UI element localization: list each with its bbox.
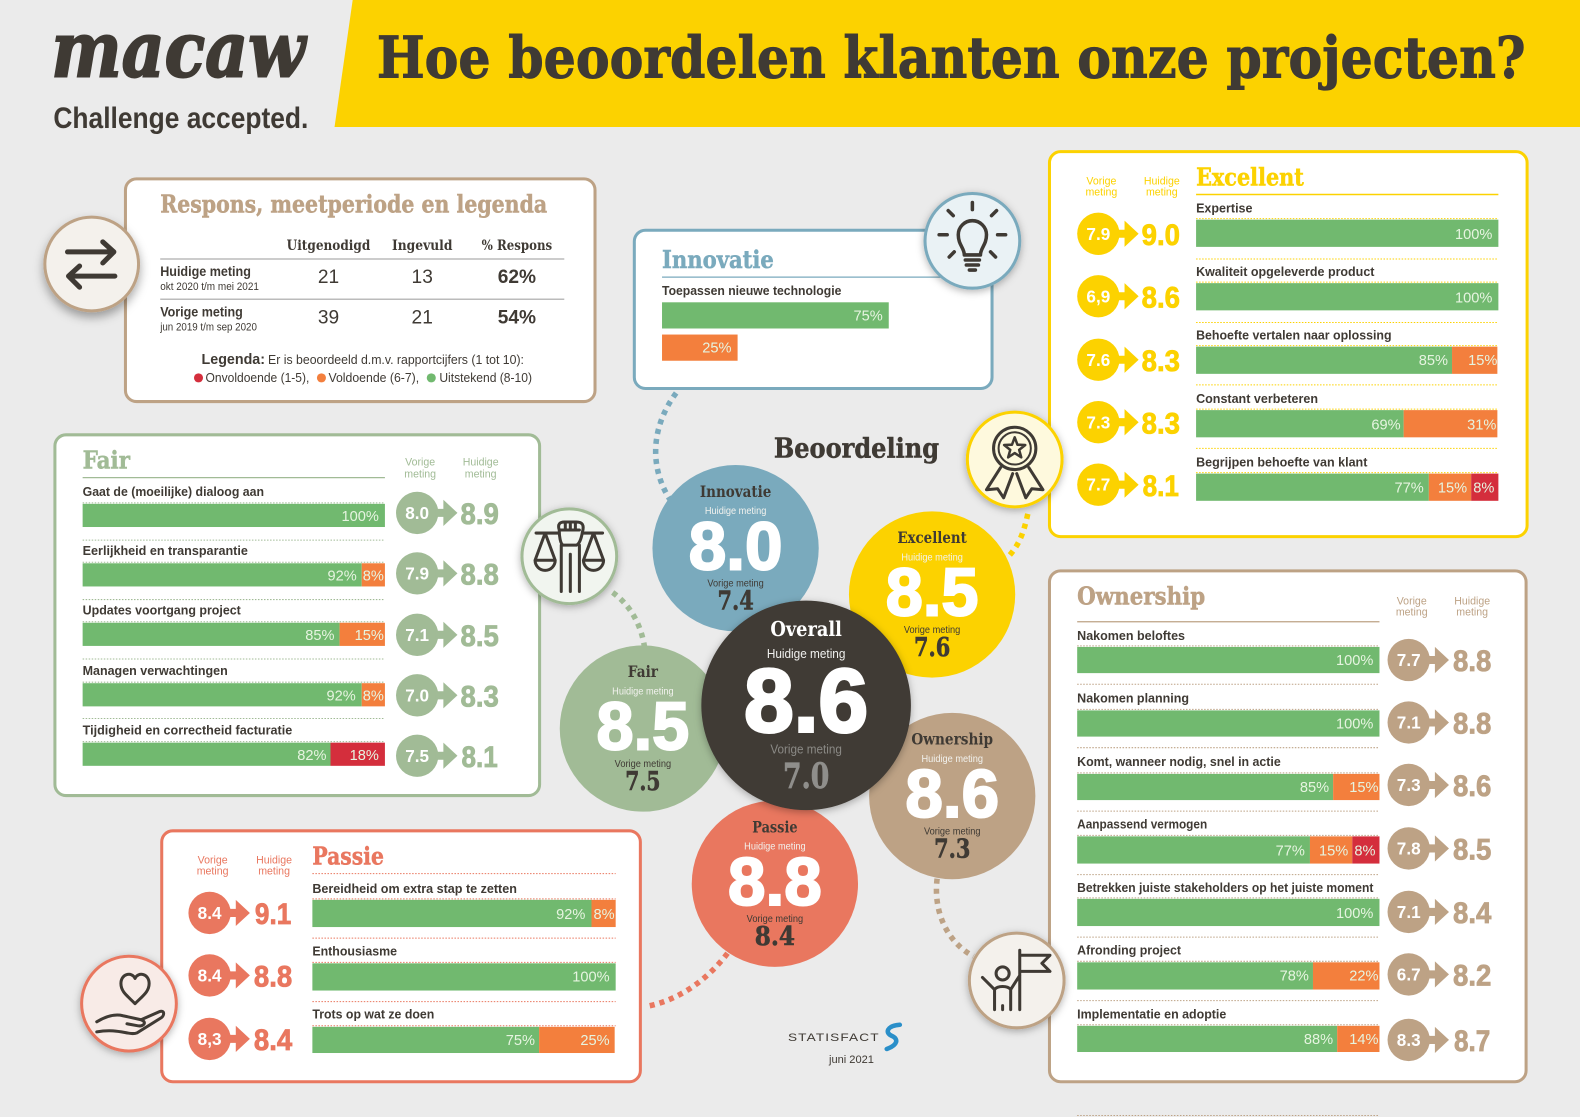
legend: Er is beoordeeld d.m.v. rapportcijfers (1 tot 10):	[268, 352, 524, 367]
bubble: passie	[692, 801, 858, 967]
bubble: innovatie: 7.4	[717, 586, 754, 617]
row: eerlijkheid en transparantie	[83, 543, 499, 595]
bubble: passie: 8.4	[755, 921, 795, 952]
table: Uitgenodigd	[287, 238, 371, 254]
column headers: meting	[197, 866, 229, 878]
connector: innovatie	[656, 393, 676, 500]
bubble: innovatie: Innovatie	[700, 482, 771, 501]
bubble: passie: Passie	[752, 817, 798, 836]
row: enthousiasme: 100%	[572, 969, 610, 985]
bubble: passie: Vorige meting	[747, 914, 803, 925]
date: juni 2021	[828, 1054, 874, 1066]
row: begrijpen behoefte van klant: 8%	[1473, 481, 1494, 497]
row: behoefte vertalen naar oplossing: 85%	[1419, 353, 1448, 369]
panel: respons, meetperiode en legenda	[125, 179, 595, 402]
column headers: meting	[1396, 607, 1428, 619]
bubble: overall	[701, 601, 911, 810]
header banner	[335, 0, 1580, 127]
row: expertise: Expertise	[1196, 201, 1253, 216]
heading: respons: Respons, meetperiode en legenda	[160, 190, 547, 219]
bubble: fair: Vorige meting	[615, 759, 671, 770]
row: behoefte vertalen naar oplossing	[1077, 328, 1497, 381]
bubble: ownership: Ownership	[911, 730, 993, 749]
bubble: ownership: 8.6	[905, 757, 999, 832]
row: updates voortgang project: 15%	[355, 628, 384, 644]
row: managen verwachtingen: 8%	[363, 688, 384, 704]
row: kwaliteit opgeleverde product: 6,9	[1086, 286, 1110, 306]
column headers: Vorige	[405, 457, 435, 469]
column headers	[1396, 596, 1490, 619]
slogan: Challenge accepted.	[53, 103, 308, 135]
row: aanpassend vermogen: 8%	[1354, 844, 1375, 860]
panel: innovatie	[634, 230, 992, 388]
row: constant verbeteren: 69%	[1371, 417, 1401, 433]
row: trots op wat ze doen: 75%	[506, 1033, 535, 1049]
row: kwaliteit opgeleverde product: Kwaliteit opgeleverde product	[1196, 264, 1375, 279]
row: updates voortgang project: 85%	[305, 628, 335, 644]
row: trots op wat ze doen	[188, 1007, 615, 1060]
table: 54%	[498, 307, 536, 328]
row: bereidheid om extra stap te zetten: 8%	[594, 907, 615, 923]
panel: ownership	[1049, 571, 1526, 1082]
row: eerlijkheid en transparantie: 7.9	[405, 563, 429, 583]
row: nakomen planning: 7.1	[1397, 713, 1421, 733]
bubble: overall: 8.6	[744, 652, 868, 752]
table: Vorige meting	[160, 304, 243, 319]
row: managen verwachtingen: 8.3	[460, 681, 499, 713]
row: managen verwachtingen: Managen verwachtingen	[83, 663, 228, 678]
row: managen verwachtingen: 92%	[326, 688, 356, 704]
column headers: meting	[404, 469, 436, 481]
row: trots op wat ze doen: 8,3	[198, 1029, 221, 1049]
row: enthousiasme: 8.8	[254, 962, 292, 994]
row: trots op wat ze doen: 8.4	[254, 1025, 293, 1057]
column headers: Huidige	[463, 457, 499, 469]
column headers	[1085, 175, 1180, 198]
row: betrekken juiste stakeholders: 100%	[1336, 906, 1373, 922]
legend: Voldoende (6-7),	[328, 370, 419, 385]
row: begrijpen behoefte van klant: 8.1	[1143, 471, 1179, 503]
row: expertise: 100%	[1455, 227, 1492, 243]
bubble: ownership: 7.3	[934, 834, 970, 865]
bubble: fair: Huidige meting	[612, 686, 674, 697]
bubble: overall: Huidige meting	[767, 646, 845, 661]
row: updates voortgang project: 8.5	[460, 621, 499, 653]
logo: macaw: macaw	[51, 6, 308, 96]
column headers: meting	[1456, 607, 1488, 619]
icon: person with flag	[969, 933, 1064, 1028]
row: gaat de dialoog aan: 8.0	[405, 503, 429, 523]
legend: Uitstekend (8-10)	[439, 370, 532, 385]
row: nakomen planning: 8.8	[1453, 709, 1491, 741]
row: begrijpen behoefte van klant: 15%	[1438, 481, 1467, 497]
row: kwaliteit opgeleverde product: 8.6	[1142, 282, 1180, 314]
row: toepassen nieuwe technologie	[662, 283, 889, 361]
heading: excellent: Excellent	[1196, 162, 1305, 191]
column headers: meting	[465, 469, 497, 481]
connector: ownership	[936, 879, 973, 956]
table: Huidige meting	[160, 264, 251, 279]
table: 21	[412, 307, 433, 328]
row: enthousiasme	[188, 943, 616, 997]
row: eerlijkheid en transparantie: Eerlijkheid en transparantie	[83, 543, 248, 558]
row: behoefte vertalen naar oplossing: 15%	[1468, 353, 1497, 369]
row: toepassen nieuwe technologie: 25%	[702, 341, 732, 357]
row: bereidheid om extra stap te zetten: 8.4	[198, 903, 222, 923]
row: komt, wanneer nodig, snel in actie: 15%	[1349, 780, 1378, 796]
bubble: excellent: 8.5	[886, 556, 978, 631]
bubble: fair: 8.5	[597, 690, 689, 765]
row: afronding project: Afronding project	[1077, 942, 1182, 957]
row: gaat de dialoog aan: 8.9	[460, 499, 499, 531]
column headers: meting	[1146, 186, 1178, 198]
row: bereidheid om extra stap te zetten: 92%	[556, 907, 585, 923]
column headers: Huidige	[1144, 175, 1180, 187]
row: implementatie en adoptie: 8.7	[1454, 1026, 1490, 1058]
row: constant verbeteren: 7.3	[1086, 412, 1110, 432]
column headers: Vorige	[198, 855, 228, 867]
row: tijdigheid en correctheid facturatie: 8.1	[462, 742, 498, 774]
row: aanpassend vermogen: 77%	[1276, 844, 1305, 860]
row: tijdigheid en correctheid facturatie: 18%	[350, 748, 379, 764]
row: afronding project	[1077, 942, 1491, 996]
row: aanpassend vermogen: 8.5	[1453, 835, 1491, 867]
row: eerlijkheid en transparantie: 8.8	[460, 559, 499, 591]
row: constant verbeteren: 8.3	[1142, 408, 1180, 440]
row: komt, wanneer nodig, snel in actie: 7.3	[1397, 775, 1421, 795]
bubble: overall: Vorige meting	[770, 742, 842, 757]
row: afronding project: 22%	[1349, 968, 1378, 984]
icon: lightbulb	[925, 193, 1020, 288]
row: gaat de dialoog aan: 100%	[342, 509, 379, 525]
bubble: innovatie: Huidige meting	[705, 506, 766, 517]
connector: fair	[613, 593, 645, 650]
row: trots op wat ze doen: Trots op wat ze doen	[312, 1007, 434, 1022]
row: constant verbeteren: Constant verbeteren	[1196, 391, 1318, 406]
table: 21	[318, 267, 339, 288]
row: bereidheid om extra stap te zetten: Bereidheid om extra stap te zetten	[312, 881, 517, 896]
table: 13	[412, 267, 433, 288]
row: enthousiasme: Enthousiasme	[312, 943, 397, 958]
bubble: excellent: Vorige meting	[904, 625, 960, 636]
heading: fair: Fair	[83, 446, 130, 475]
row: aanpassend vermogen: 7.8	[1397, 839, 1421, 859]
row: afronding project: 6.7	[1397, 964, 1421, 984]
heading: beoordeling: Beoordeling	[774, 432, 939, 464]
column headers	[404, 457, 499, 481]
column headers: meting	[1085, 186, 1117, 198]
connector: passie	[645, 953, 728, 1007]
row: betrekken juiste stakeholders: 7.1	[1397, 902, 1421, 922]
row: implementatie en adoptie: 88%	[1304, 1032, 1333, 1048]
bubble: innovatie: 8.0	[689, 509, 782, 584]
row: betrekken juiste stakeholders: 8.4	[1453, 898, 1492, 930]
bubble: innovatie: Vorige meting	[707, 578, 764, 589]
row: aanpassend vermogen: 15%	[1319, 844, 1348, 860]
row: nakomen beloftes	[1077, 628, 1491, 681]
row: afronding project: 8.2	[1453, 960, 1491, 992]
bubble: ownership: Huidige meting	[921, 754, 983, 765]
column headers: Vorige	[1397, 596, 1427, 608]
row: nakomen planning: Nakomen planning	[1077, 690, 1189, 705]
row: komt, wanneer nodig, snel in actie	[1077, 754, 1491, 806]
row: behoefte vertalen naar oplossing: Behoefte vertalen naar oplossing	[1196, 328, 1392, 343]
row: begrijpen behoefte van klant: 7.7	[1086, 475, 1110, 495]
row: begrijpen behoefte van klant	[1077, 455, 1498, 506]
row: kwaliteit opgeleverde product	[1077, 264, 1498, 317]
row: expertise	[1077, 201, 1498, 255]
row: eerlijkheid en transparantie: 92%	[327, 568, 357, 584]
row: komt, wanneer nodig, snel in actie: 85%	[1300, 780, 1329, 796]
row: tijdigheid en correctheid facturatie: 7.5	[405, 746, 430, 766]
icon: hand with heart	[82, 956, 176, 1051]
bubble: passie: 8.8	[728, 845, 822, 920]
bubble: excellent: Huidige meting	[901, 552, 963, 563]
table: okt 2020 t/m mei 2021	[160, 281, 259, 293]
row: nakomen planning	[1077, 690, 1491, 744]
bubble: innovatie	[652, 465, 819, 631]
row: managen verwachtingen: 7.0	[405, 685, 429, 705]
panel: excellent	[1049, 152, 1527, 537]
table: jun 2019 t/m sep 2020	[159, 322, 257, 334]
row: updates voortgang project	[83, 603, 499, 656]
bubble: fair: Fair	[628, 662, 658, 681]
row: eerlijkheid en transparantie: 8%	[363, 568, 384, 584]
row: behoefte vertalen naar oplossing: 8.3	[1142, 346, 1180, 378]
row: constant verbeteren	[1077, 391, 1497, 443]
panel: fair	[55, 435, 540, 796]
row: afronding project: 78%	[1280, 968, 1309, 984]
row: nakomen beloftes: 100%	[1336, 653, 1373, 669]
row: bereidheid om extra stap te zetten	[188, 881, 616, 934]
bubble: ownership	[869, 713, 1035, 879]
heading: innovatie: Innovatie	[662, 245, 774, 274]
table: 62%	[498, 267, 536, 288]
icon: scales with fist	[522, 509, 617, 604]
table: 39	[318, 307, 339, 328]
row: enthousiasme: 8.4	[198, 965, 222, 985]
table	[159, 238, 564, 334]
logo: statisfact	[788, 1025, 900, 1066]
row: begrijpen behoefte van klant: 77%	[1395, 481, 1424, 497]
row: behoefte vertalen naar oplossing: 7.6	[1086, 350, 1110, 370]
row: trots op wat ze doen: 25%	[580, 1033, 610, 1049]
legend: Legenda:	[202, 351, 265, 368]
bubble: overall: Overall	[770, 617, 842, 641]
heading: ownership: Ownership	[1077, 582, 1205, 611]
legend	[194, 351, 532, 385]
row: updates voortgang project: 7.1	[405, 625, 430, 645]
column headers: Huidige	[1454, 596, 1490, 608]
bubble: overall: 7.0	[783, 757, 829, 797]
row: tijdigheid en correctheid facturatie	[83, 723, 498, 777]
bubble: excellent	[849, 511, 1015, 678]
row: bereidheid om extra stap te zetten: 9.1	[255, 899, 291, 931]
row: tijdigheid en correctheid facturatie: Tijdigheid en correctheid facturatie	[83, 723, 292, 738]
bubble: fair	[560, 645, 726, 812]
row: aanpassend vermogen	[1077, 816, 1491, 870]
row: toepassen nieuwe technologie: Toepassen nieuwe technologie	[662, 283, 841, 298]
row: komt, wanneer nodig, snel in actie: Komt, wanneer nodig, snel in actie	[1077, 754, 1281, 769]
column headers: Huidige	[256, 855, 292, 867]
row: implementatie en adoptie: 14%	[1349, 1032, 1378, 1048]
bubble: fair: 7.5	[625, 766, 661, 797]
row: updates voortgang project: Updates voortgang project	[83, 603, 241, 618]
heading: passie: Passie	[312, 842, 384, 871]
row: begrijpen behoefte van klant: Begrijpen behoefte van klant	[1196, 455, 1368, 470]
connector: excellent	[1009, 514, 1028, 556]
column headers: Vorige	[1086, 175, 1116, 187]
table: % Respons	[482, 238, 552, 254]
row: nakomen planning: 100%	[1336, 717, 1373, 733]
row: managen verwachtingen	[83, 663, 499, 716]
bubble: passie: Huidige meting	[744, 841, 806, 852]
icon: arrows	[45, 217, 139, 311]
row: toepassen nieuwe technologie: 75%	[853, 308, 883, 324]
column headers	[197, 855, 292, 878]
icon: rosette	[967, 412, 1062, 507]
row: constant verbeteren: 31%	[1467, 417, 1496, 433]
row: betrekken juiste stakeholders	[1077, 880, 1492, 933]
row: implementatie en adoptie: 8.3	[1397, 1030, 1421, 1050]
row: nakomen beloftes: Nakomen beloftes	[1077, 628, 1185, 643]
row: implementatie en adoptie	[1077, 1007, 1490, 1061]
row: gaat de dialoog aan: Gaat de (moeilijke) dialoog aan	[83, 484, 264, 499]
row: aanpassend vermogen: Aanpassend vermogen	[1077, 816, 1207, 831]
row: expertise: 9.0	[1142, 220, 1180, 252]
panel: passie	[162, 831, 640, 1082]
row: implementatie en adoptie: Implementatie en adoptie	[1077, 1007, 1226, 1022]
row: nakomen beloftes: 8.8	[1453, 646, 1491, 678]
bubble: ownership: Vorige meting	[924, 826, 980, 837]
logo: statisfact: STATISFACT	[788, 1032, 880, 1044]
legend: Onvoldoende (1-5),	[206, 370, 309, 385]
row: kwaliteit opgeleverde product: 100%	[1455, 290, 1492, 306]
bubble: excellent: Excellent	[897, 528, 967, 547]
row: betrekken juiste stakeholders: Betrekken juiste stakeholders op het juiste moment	[1077, 880, 1374, 895]
row: expertise: 7.9	[1086, 224, 1110, 244]
column headers: meting	[258, 866, 290, 878]
row: gaat de dialoog aan	[83, 484, 499, 534]
row: komt, wanneer nodig, snel in actie: 8.6	[1453, 771, 1491, 803]
bubble: excellent: 7.6	[914, 632, 950, 663]
row: tijdigheid en correctheid facturatie: 82%	[297, 748, 326, 764]
table: Ingevuld	[392, 238, 453, 254]
row: nakomen beloftes: 7.7	[1397, 650, 1421, 670]
